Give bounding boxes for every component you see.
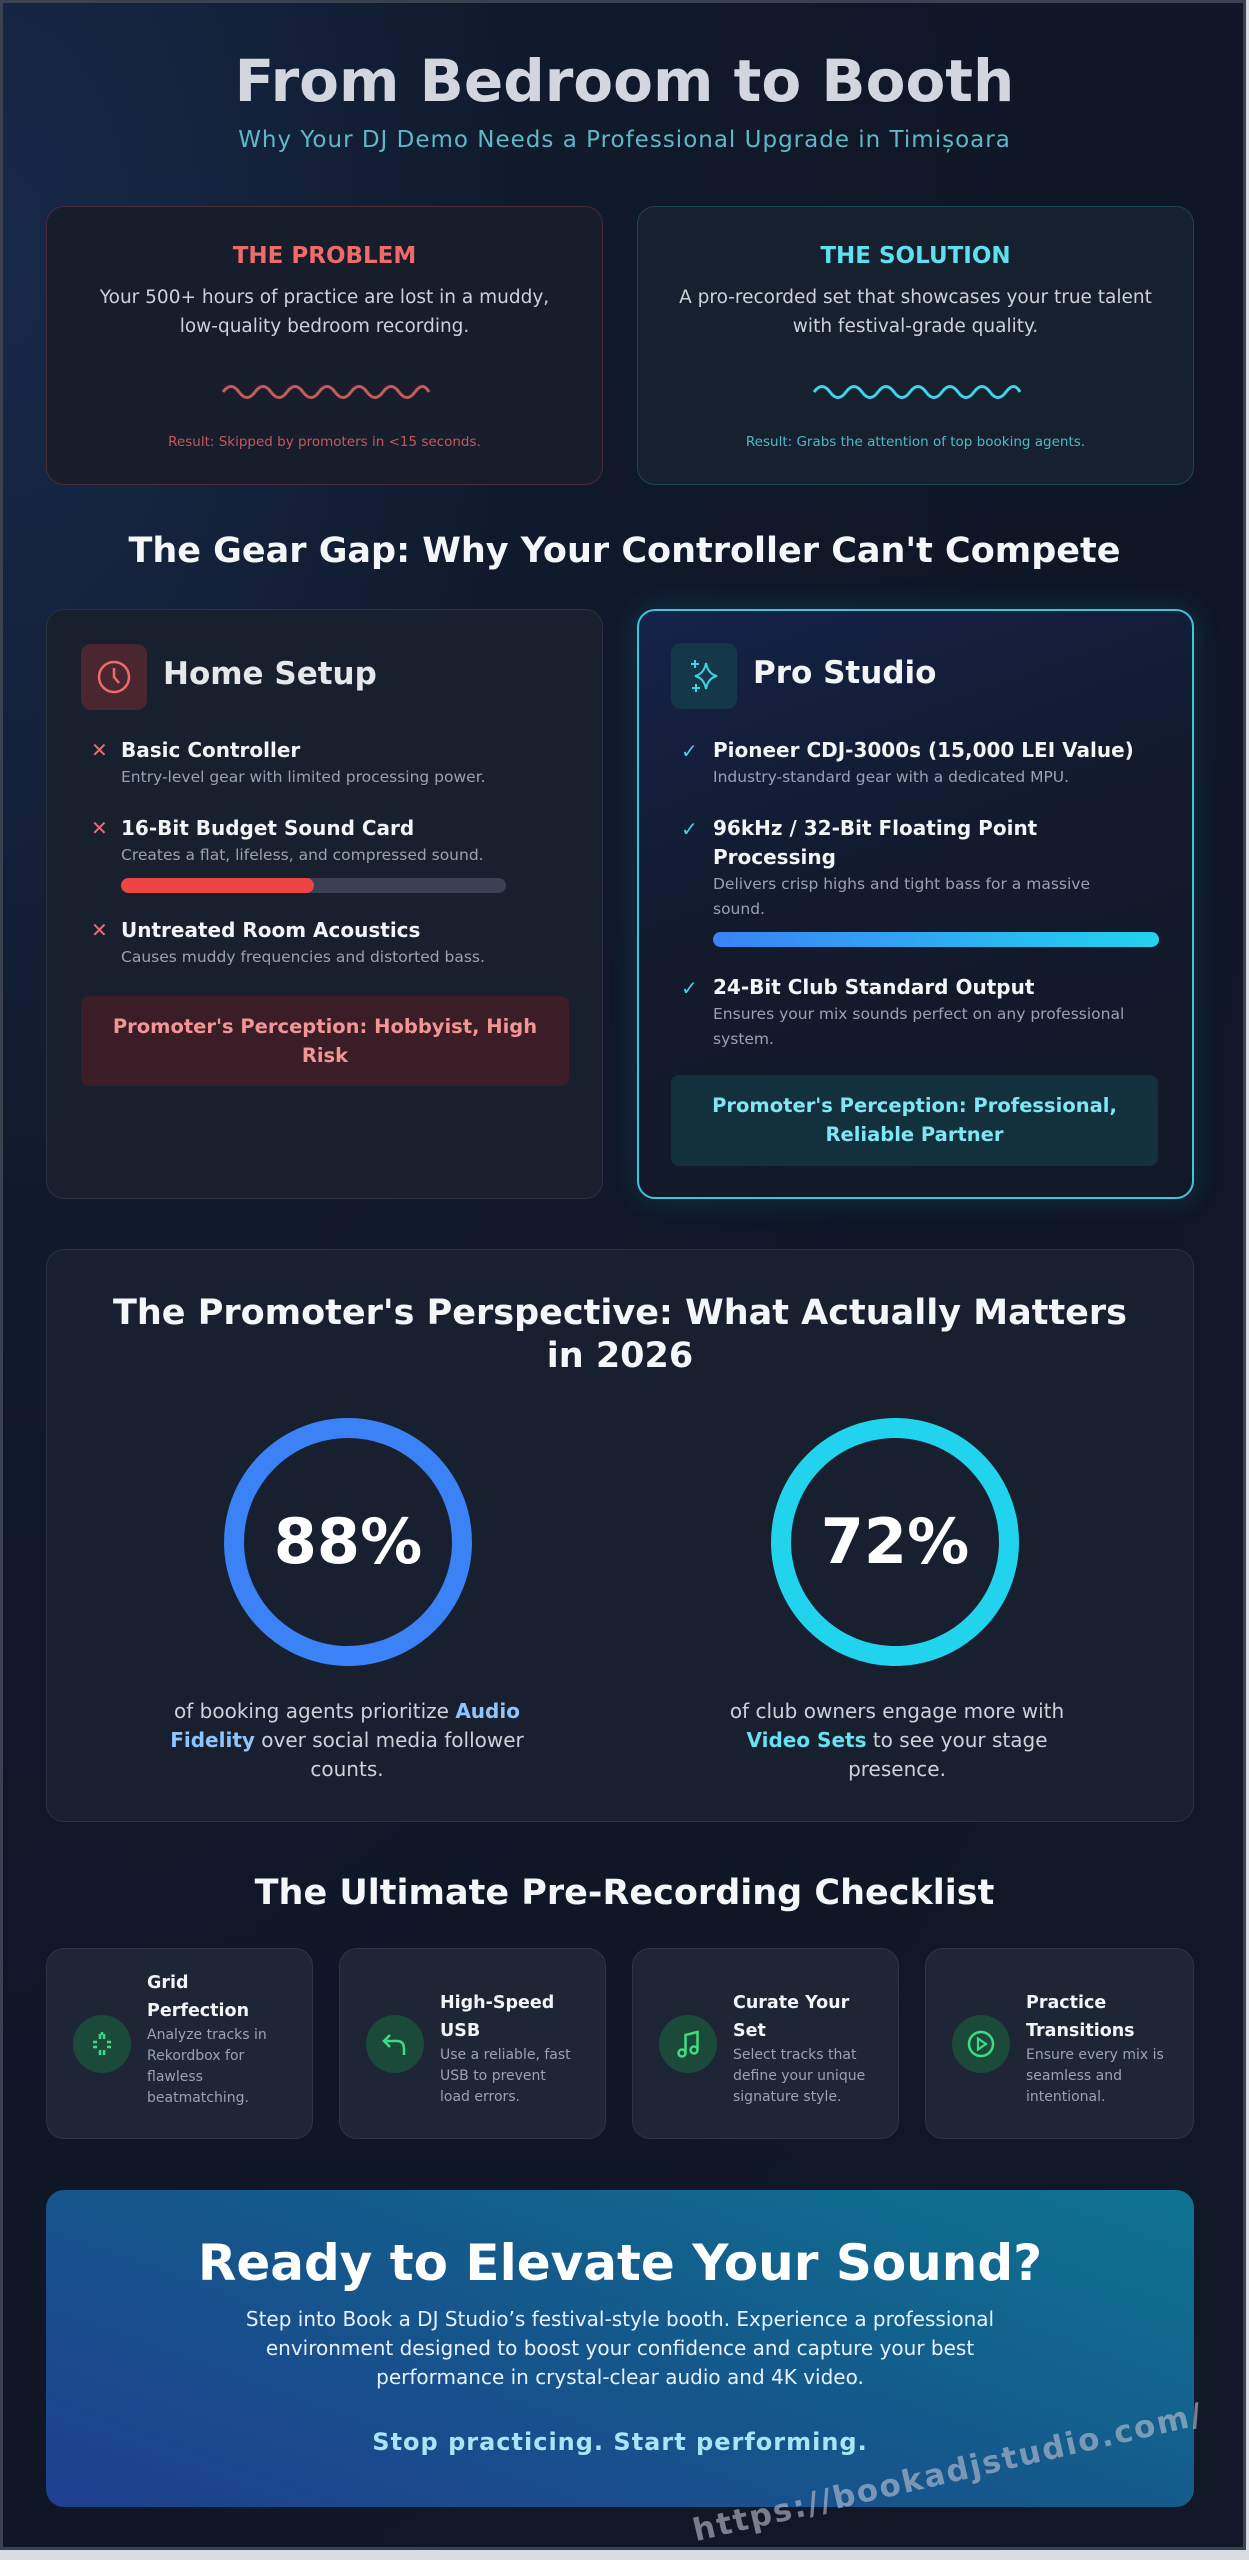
- icon: sparkle: [671, 643, 737, 709]
- cta tagline: Stop practicing. Start performing.: [372, 2428, 868, 2456]
- item: sound card: 16-Bit Budget Sound Card: [121, 816, 414, 840]
- card: curate: Set: [733, 2021, 766, 2041]
- problem text: Your 500+ hours of practice are lost in a muddy,: [100, 287, 549, 308]
- item: sound card: [91, 816, 506, 893]
- card: usb: Use a reliable, fast USB to prevent load errors.: [440, 2047, 571, 2105]
- item: basic controller: ✕: [91, 738, 108, 762]
- card: curate: Select tracks that define your unique signature style.: [733, 2047, 865, 2105]
- perspective heading: in 2026: [547, 1336, 693, 1376]
- panel: home setup: [46, 609, 603, 1199]
- card: grid perfection: [46, 1948, 313, 2139]
- item: 24-bit: system.: [713, 1030, 774, 1048]
- card: transitions: Practice: [1026, 1993, 1106, 2013]
- item: sound card: Creates a flat, lifeless, and compressed sound.: [121, 846, 484, 864]
- chart: 72% ring: 72%: [821, 1505, 969, 1578]
- card: grid perfection: Analyze tracks in Rekordbox for flawless beatmatching.: [147, 2027, 267, 2106]
- cta heading: Ready to Elevate Your Sound?: [198, 2234, 1042, 2292]
- subtitle: Why Your DJ Demo Needs a Professional Upgrade in Timișoara: [238, 127, 1011, 153]
- card: grid perfection: Grid: [147, 1973, 189, 1993]
- problem heading: THE PROBLEM: [233, 243, 416, 269]
- item: 24-bit: [681, 975, 1124, 1048]
- cta body: [246, 2307, 994, 2389]
- card: usb: [339, 1948, 606, 2139]
- item: acoustics: ✕: [91, 918, 108, 942]
- heading: gear gap: The Gear Gap: Why Your Controller Can't Compete: [128, 531, 1121, 571]
- card: transitions: [925, 1948, 1194, 2139]
- callout: professional: Promoter's Perception: Professional,: [712, 1094, 1117, 1117]
- callout: professional: [671, 1075, 1158, 1166]
- callout: professional: Reliable Partner: [825, 1123, 1004, 1146]
- watermark url: https://bookadjstudio.com/: [689, 2396, 1207, 2549]
- problem result: Result: Skipped by promoters in <15 seconds.: [168, 434, 481, 450]
- solution text: with festival-grade quality.: [793, 316, 1038, 337]
- panel: problem: [46, 206, 603, 485]
- item: 96khz: Delivers crisp highs and tight bass for a massive: [713, 875, 1090, 893]
- icon: clean wave: [812, 385, 1022, 399]
- cta body: Step into Book a DJ Studio’s festival-style booth. Experience a professional: [246, 2307, 994, 2331]
- cta body: environment designed to boost your confidence and capture your best: [266, 2336, 974, 2360]
- panel: solution: [637, 206, 1194, 485]
- item: 96khz: sound.: [713, 900, 765, 918]
- solution text: A pro-recorded set that showcases your true talent: [679, 287, 1152, 308]
- perspective heading: [113, 1293, 1127, 1376]
- panel: promoter perspective: [46, 1249, 1194, 1822]
- item: 96khz: ✓: [681, 817, 698, 841]
- item: basic controller: Basic Controller: [121, 738, 300, 762]
- caption: video sets: of club owners engage more with Video Sets to see your stage presence.: [730, 1699, 1064, 1781]
- cta body: performance in crystal-clear audio and 4K video.: [376, 2365, 864, 2389]
- panel: cta: [46, 2190, 1194, 2507]
- chart: 88% ring: [224, 1418, 472, 1666]
- perspective heading: The Promoter's Perspective: What Actually Matters: [113, 1293, 1127, 1333]
- solution heading: THE SOLUTION: [820, 243, 1011, 269]
- card: transitions: Transitions: [1026, 2021, 1135, 2041]
- card: usb: USB: [440, 2021, 480, 2041]
- pro studio heading: Pro Studio: [753, 655, 936, 691]
- problem text: [100, 287, 549, 337]
- problem text: low-quality bedroom recording.: [180, 316, 469, 337]
- item: acoustics: [91, 918, 485, 966]
- chart: 72% ring: [771, 1418, 1019, 1666]
- callout: hobbyist: Risk: [302, 1044, 348, 1067]
- item: 96khz: Processing: [713, 845, 836, 869]
- item: 96khz: 96kHz / 32-Bit Floating Point: [713, 816, 1037, 840]
- icon: music note: [659, 2015, 717, 2073]
- title: From Bedroom to Booth: [235, 47, 1014, 115]
- panel: pro studio: [637, 609, 1194, 1199]
- callout: hobbyist: Promoter's Perception: Hobbyist, High: [113, 1015, 537, 1038]
- caption: audio fidelity: of booking agents prioritize Audio Fidelity over social media follower counts.: [170, 1699, 524, 1781]
- item: basic controller: [91, 738, 486, 786]
- home setup heading: Home Setup: [163, 656, 377, 692]
- card: usb: High-Speed: [440, 1993, 554, 2013]
- solution result: Result: Grabs the attention of top booking agents.: [746, 434, 1085, 450]
- icon: muddy wave: [222, 385, 430, 399]
- card: grid perfection: Perfection: [147, 2001, 249, 2021]
- heading: checklist: The Ultimate Pre-Recording Checklist: [255, 1873, 994, 1913]
- item: 96khz: [681, 816, 1159, 947]
- item: sound card: ✕: [91, 816, 108, 840]
- item: pioneer: Industry-standard gear with a dedicated MPU.: [713, 768, 1069, 786]
- card: curate: [632, 1948, 899, 2139]
- item: acoustics: Causes muddy frequencies and distorted bass.: [121, 948, 485, 966]
- chart: 88% ring: 88%: [274, 1505, 422, 1578]
- callout: hobbyist: [81, 996, 569, 1086]
- item: 24-bit: Ensures your mix sounds perfect on any professional: [713, 1005, 1124, 1023]
- bar: low quality: [121, 878, 506, 893]
- icon: clock: [81, 644, 147, 710]
- icon: play: [952, 2015, 1010, 2073]
- solution text: [679, 287, 1152, 337]
- item: acoustics: Untreated Room Acoustics: [121, 918, 420, 942]
- item: pioneer: [681, 738, 1134, 786]
- icon: grid: [73, 2015, 131, 2073]
- icon: return arrow: [366, 2015, 424, 2073]
- item: pioneer: Pioneer CDJ-3000s (15,000 LEI Value): [713, 738, 1134, 762]
- card: transitions: Ensure every mix is seamless and intentional.: [1026, 2047, 1164, 2105]
- bar: high quality: [713, 932, 1159, 947]
- card: curate: Curate Your: [733, 1993, 849, 2013]
- item: 24-bit: 24-Bit Club Standard Output: [713, 975, 1034, 999]
- item: pioneer: ✓: [681, 739, 698, 763]
- item: 24-bit: ✓: [681, 976, 698, 1000]
- item: basic controller: Entry-level gear with limited processing power.: [121, 768, 486, 786]
